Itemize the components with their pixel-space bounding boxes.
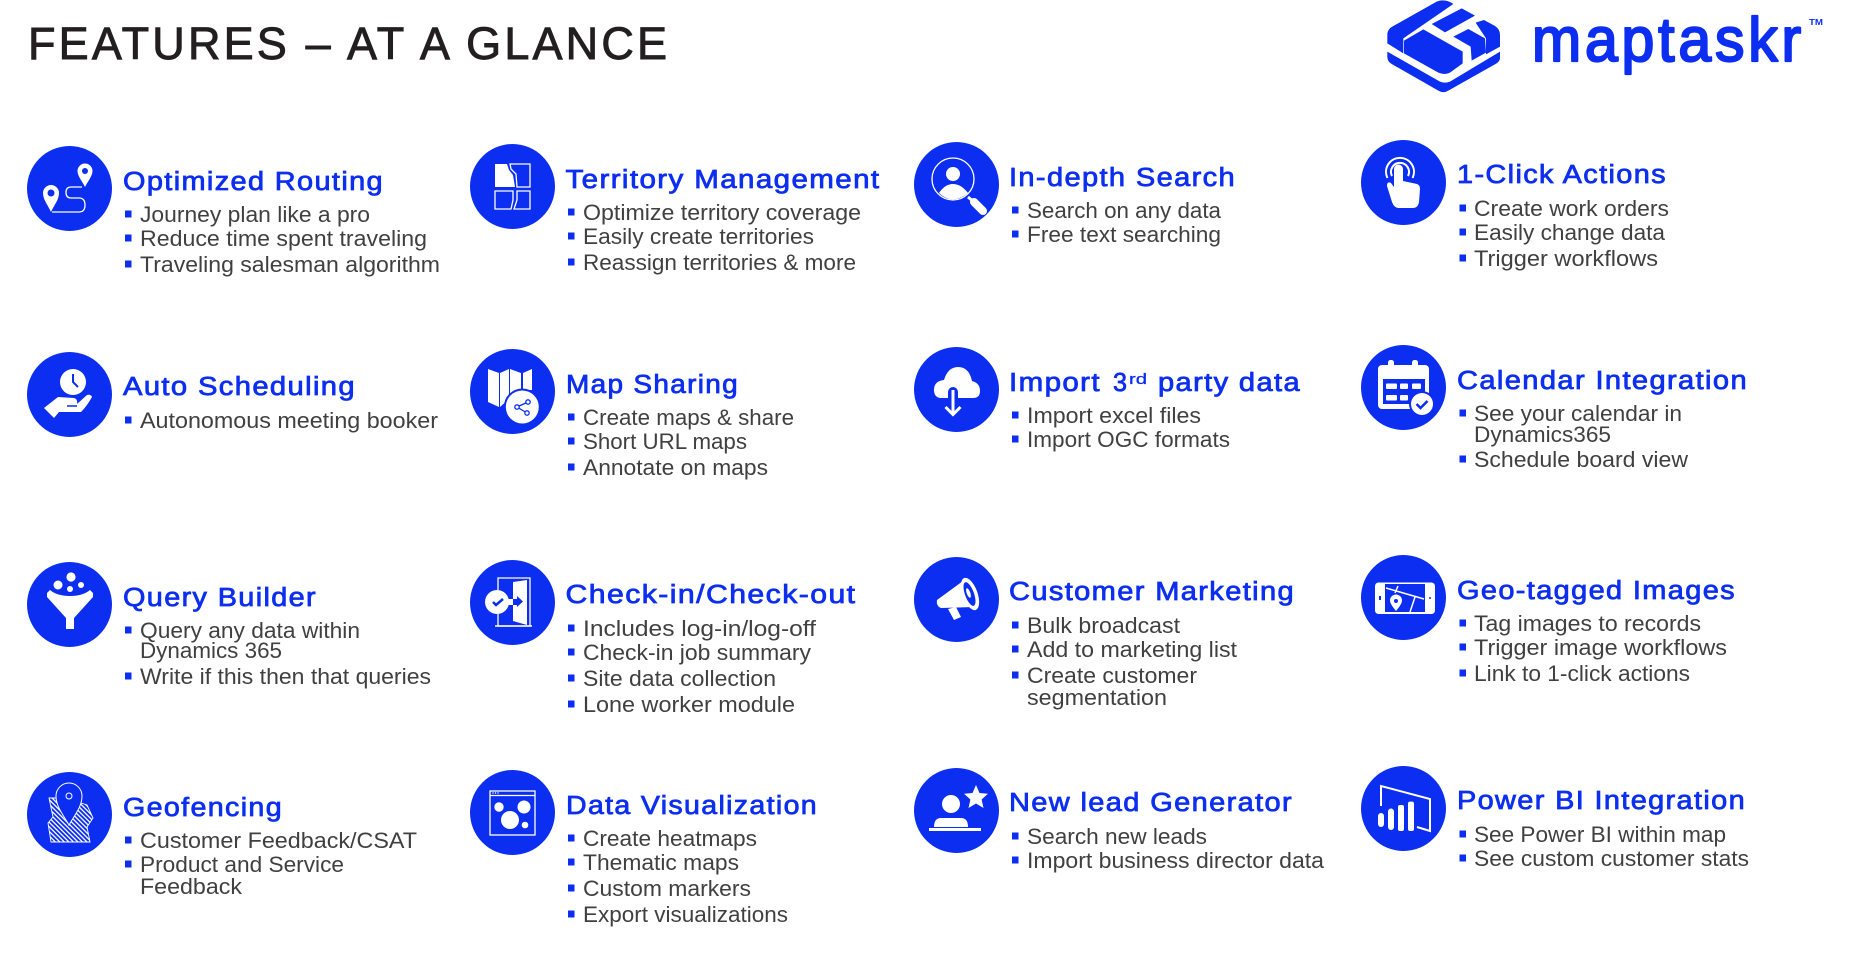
heading: Query Builder	[123, 584, 317, 612]
feature list: Easily create territories	[583, 224, 814, 249]
feature list	[568, 826, 788, 927]
feature list: Trigger workflows	[1474, 246, 1658, 271]
panel: Calendar Integration	[1361, 345, 1748, 472]
heading: Geo-tagged Images	[1457, 577, 1736, 605]
feature list: Traveling salesman algorithm	[140, 252, 440, 277]
heading: rd	[1129, 371, 1147, 388]
heading: In-depth Search	[1009, 164, 1236, 192]
icon: route pins	[27, 146, 112, 231]
heading: Calendar Integration	[1457, 367, 1748, 395]
panel: Map Sharing	[470, 349, 794, 480]
panel: Geofencing	[27, 772, 417, 899]
heading: Customer Marketing	[1009, 578, 1295, 606]
icon: calendar check	[1361, 345, 1446, 430]
heading: Import	[1009, 369, 1101, 397]
feature list	[568, 405, 794, 480]
heading: 1-Click Actions	[1457, 161, 1667, 189]
icon: megaphone	[914, 557, 999, 642]
feature list: Bulk broadcast	[1027, 613, 1180, 638]
feature list: Tag images to records	[1474, 611, 1701, 636]
heading	[1009, 369, 1301, 397]
trademark: TM	[1809, 17, 1823, 27]
panel: Auto Scheduling	[27, 352, 438, 437]
feature list: Short URL maps	[583, 429, 747, 454]
panel: 1-Click Actions	[1361, 140, 1669, 271]
heading: Optimized Routing	[123, 168, 384, 196]
heading: Data Visualization	[566, 792, 818, 820]
panel: Query Builder	[27, 562, 431, 689]
feature list	[1460, 611, 1727, 686]
icon: person search	[914, 142, 999, 227]
feature list	[1012, 824, 1325, 873]
heading: Map Sharing	[566, 371, 739, 399]
panel: Geo-tagged Images	[1361, 555, 1736, 686]
feature list: Import business director data	[1027, 848, 1325, 873]
feature list	[1460, 401, 1688, 472]
icon: bubble chart window	[470, 770, 555, 855]
feature list: See your calendar in	[1474, 401, 1682, 426]
title: FEATURES – AT A GLANCE	[28, 18, 667, 69]
panel: Territory Management	[470, 144, 880, 275]
icon: territory map	[470, 144, 555, 229]
heading: Geofencing	[123, 794, 283, 822]
feature list	[568, 200, 861, 275]
logo wordmark: maptaskr	[1532, 6, 1805, 75]
feature list: Query any data within	[140, 618, 360, 643]
feature list	[1012, 613, 1237, 710]
panel: Import 3rd party data	[914, 347, 1301, 452]
feature list: Customer Feedback/CSAT	[140, 828, 417, 853]
panel: New lead Generator	[914, 768, 1325, 873]
icon: power bi chart	[1361, 766, 1446, 851]
feature list: Autonomous meeting booker	[140, 408, 438, 433]
feature list: Reassign territories & more	[583, 250, 856, 275]
logo: maptaskr	[1387, 0, 1823, 92]
feature list: Easily change data	[1474, 220, 1666, 245]
feature list	[1460, 822, 1749, 871]
panel: Check-in/Check-out	[470, 560, 856, 717]
icon: phone with map	[1361, 555, 1446, 640]
feature list: Dynamics365	[1474, 422, 1611, 447]
feature list: Journey plan like a pro	[140, 202, 370, 227]
feature list: Create customer	[1027, 663, 1197, 688]
feature list: Schedule board view	[1474, 447, 1688, 472]
feature list: See Power BI within map	[1474, 822, 1726, 847]
feature list: Export visualizations	[583, 902, 788, 927]
feature list	[1012, 198, 1222, 247]
icon: door check-in	[470, 560, 555, 645]
feature list	[1012, 403, 1230, 452]
feature list: Search on any data	[1027, 198, 1222, 223]
feature list: Search new leads	[1027, 824, 1207, 849]
feature list	[568, 616, 817, 717]
icon: funnel	[27, 562, 112, 647]
heading: 3	[1113, 369, 1127, 397]
icon: map share	[470, 349, 555, 434]
heading: Auto Scheduling	[123, 373, 356, 401]
panel: Customer Marketing	[914, 557, 1295, 710]
feature list	[125, 618, 431, 689]
icon: person with star	[914, 768, 999, 853]
icon: logo cube	[1387, 0, 1500, 92]
feature list: Thematic maps	[583, 850, 739, 875]
feature list: Add to marketing list	[1027, 637, 1237, 662]
panel: Data Visualization	[470, 770, 818, 927]
feature list: Create maps & share	[583, 405, 794, 430]
feature list: See custom customer stats	[1474, 846, 1749, 871]
feature list: Dynamics 365	[140, 638, 282, 663]
feature list: Link to 1-click actions	[1474, 661, 1690, 686]
feature list: Import OGC formats	[1027, 427, 1230, 452]
heading: New lead Generator	[1009, 789, 1293, 817]
panel: Optimized Routing	[27, 146, 440, 277]
feature list: Trigger image workflows	[1474, 635, 1727, 660]
feature list: Site data collection	[583, 666, 776, 691]
feature list: Free text searching	[1027, 222, 1221, 247]
panel: In-depth Search	[914, 142, 1236, 247]
feature list: Product and Service	[140, 852, 344, 877]
feature list: Annotate on maps	[583, 455, 768, 480]
feature list: Optimize territory coverage	[583, 200, 861, 225]
feature list: Custom markers	[583, 876, 751, 901]
heading: Check-in/Check-out	[566, 581, 856, 609]
feature list: Check-in job summary	[583, 640, 811, 665]
heading: party data	[1158, 369, 1301, 397]
feature list: segmentation	[1027, 685, 1167, 710]
feature list: Write if this then that queries	[140, 664, 431, 689]
feature list: Feedback	[140, 874, 243, 899]
icon: cloud download	[914, 347, 999, 432]
heading: Power BI Integration	[1457, 787, 1746, 815]
icon: clock in hand	[27, 352, 112, 437]
feature list: Reduce time spent traveling	[140, 226, 427, 251]
feature list	[125, 828, 417, 899]
icon: geofence pin	[27, 772, 112, 857]
feature list: Lone worker module	[583, 692, 795, 717]
feature list: Create heatmaps	[583, 826, 757, 851]
feature list: Includes log-in/log-off	[583, 616, 817, 641]
feature list	[1460, 196, 1669, 271]
feature list: Import excel files	[1027, 403, 1201, 428]
feature list: Create work orders	[1474, 196, 1669, 221]
feature list	[125, 202, 440, 277]
panel: Power BI Integration	[1361, 766, 1749, 871]
heading: Territory Management	[566, 166, 880, 194]
icon: touch hand	[1361, 140, 1446, 225]
